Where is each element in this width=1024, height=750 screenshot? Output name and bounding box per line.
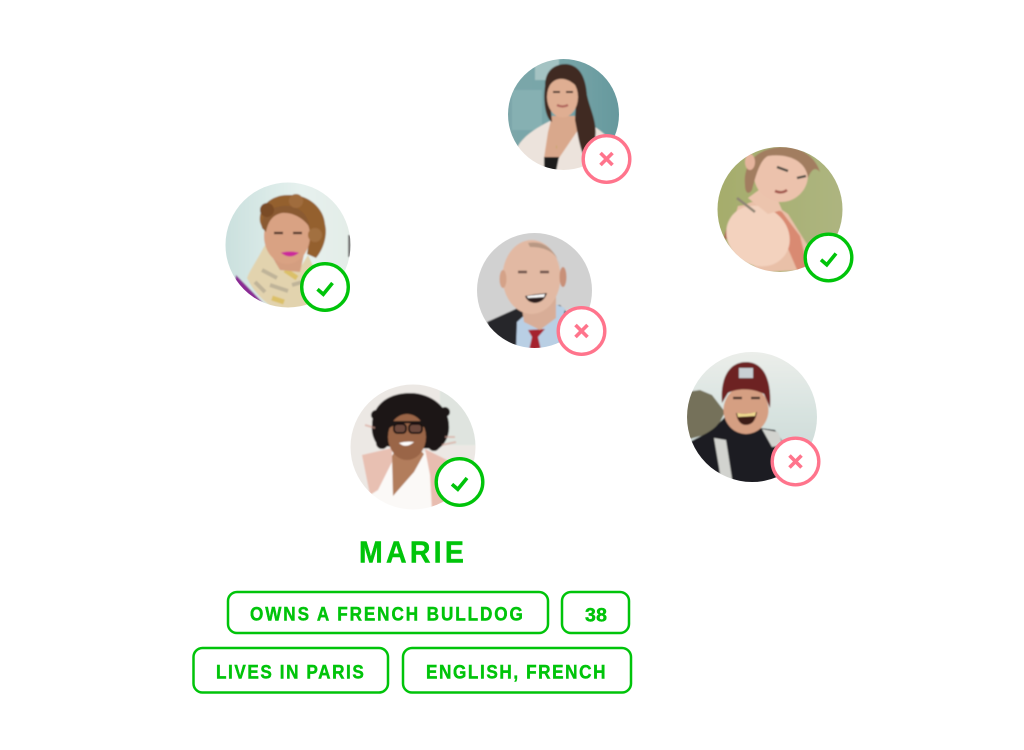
badge: accepted check: [436, 459, 483, 505]
photo: afro woman: [350, 384, 476, 507]
photo: long dark hair woman: [508, 59, 619, 170]
portrait: man in red beanie, rejected: [685, 350, 820, 485]
portrait: curly-haired woman with scarf, accepted: [222, 180, 354, 312]
badge: rejected x: [583, 136, 630, 182]
photo: beanie man: [685, 350, 820, 485]
badge: accepted check: [805, 234, 852, 281]
photo: overalls woman: [718, 147, 842, 272]
photo: curly-haired woman: [226, 182, 350, 308]
badge: rejected x: [772, 438, 819, 485]
tag: languages: ENGLISH, FRENCH: [426, 660, 606, 683]
tag: owns a French bulldog: [228, 592, 548, 633]
portrait: elderly man in suit, rejected: [475, 230, 605, 354]
portrait: woman with afro and glasses, accepted: [348, 382, 483, 515]
tag: age 38: [562, 592, 629, 633]
portrait: woman with long dark hair, rejected: [505, 55, 630, 182]
badge: accepted check: [302, 264, 348, 310]
photo: elderly man: [475, 230, 595, 350]
tag: lives in Paris: LIVES IN PARIS: [216, 660, 364, 683]
portrait: woman outdoors with overalls, accepted: [714, 142, 852, 281]
tag: languages: [403, 648, 631, 692]
badge: rejected x: [558, 308, 605, 354]
tag: owns a French bulldog: OWNS A FRENCH BULLDOG: [250, 602, 523, 625]
tag: age 38: 38: [585, 604, 607, 626]
name heading: MARIE: [359, 535, 464, 570]
tag: lives in Paris: [194, 648, 388, 692]
